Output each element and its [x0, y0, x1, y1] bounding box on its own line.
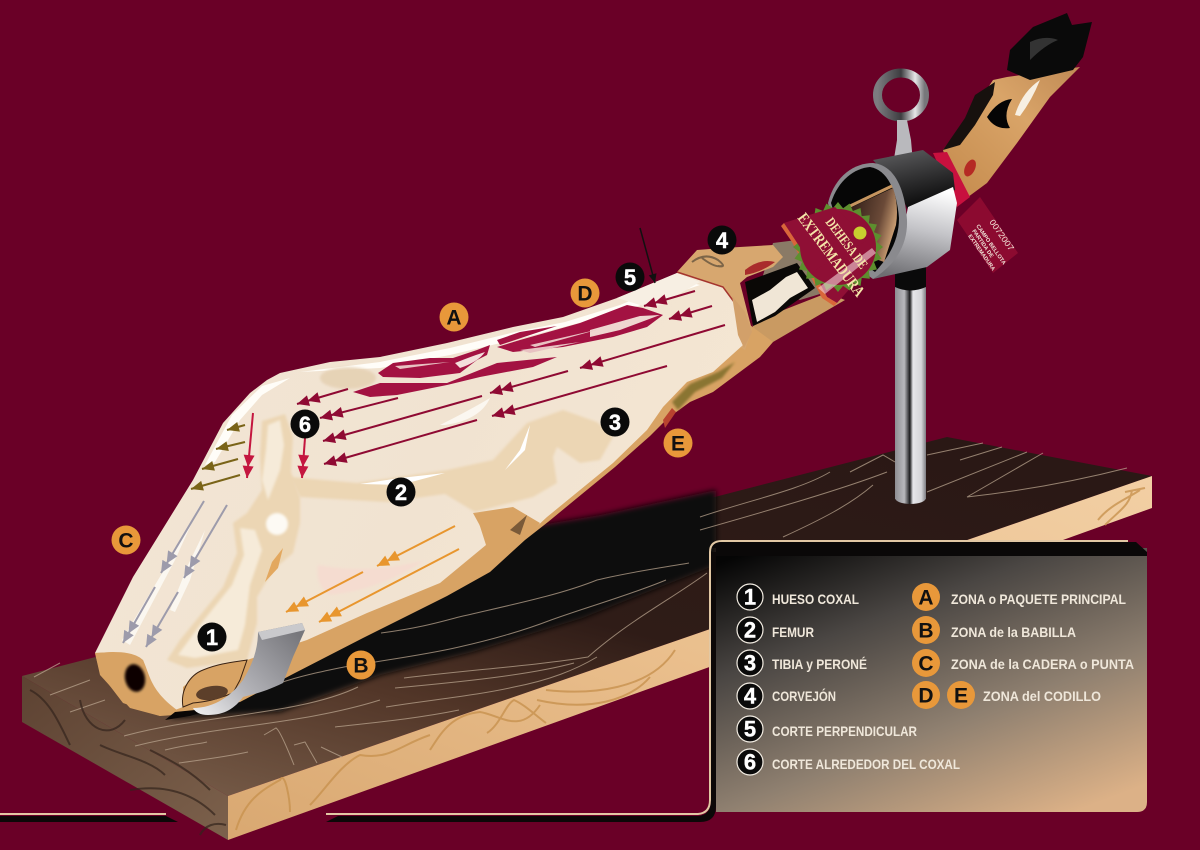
legend item B: [912, 616, 1076, 644]
legend item 2: [737, 617, 814, 643]
foot highlight: [1015, 80, 1040, 116]
legend panel: [326, 541, 1147, 822]
badge 4: 4: [716, 228, 729, 253]
collar opening rim: [828, 163, 907, 279]
wood grain top: [34, 443, 1127, 765]
legend item 6: [737, 749, 960, 775]
femoral knob: [266, 513, 288, 535]
cut face highlight: [617, 273, 700, 308]
coxal upper light core: [262, 420, 284, 500]
legend item B: B: [918, 620, 934, 642]
legend item 3: 3: [744, 650, 756, 676]
bone hollow: [265, 548, 283, 582]
pink patch: [318, 560, 425, 595]
arrows: zone C grey: [123, 501, 227, 647]
stem: [893, 120, 913, 165]
badge 6: [290, 410, 320, 438]
band text: DEHESA DE: [822, 215, 870, 272]
tag: 0072007: [987, 217, 1016, 253]
badge 3: 3: [609, 410, 621, 435]
olive blotch zone E: [672, 362, 735, 410]
legend item 3: TIBIA y PERONÉ: [772, 656, 867, 672]
legend item 5: 5: [744, 716, 756, 742]
collar upper body: [873, 150, 955, 210]
legend item 4: [737, 683, 836, 709]
panel frame line: [326, 541, 1128, 814]
wood grain front: [236, 488, 1145, 830]
tag: [957, 197, 1018, 273]
metal hook: [193, 623, 305, 715]
badge A: A: [446, 306, 462, 330]
inner tube: [850, 188, 897, 262]
badge B: [346, 650, 376, 680]
exposed bone gap: [745, 263, 815, 326]
badge E: [664, 428, 692, 458]
hoof highlight: [1030, 38, 1058, 60]
legend item A: ZONA o PAQUETE PRINCIPAL: [951, 591, 1126, 607]
bone highlights: [360, 425, 530, 485]
band seal: [854, 226, 866, 240]
badge D: D: [577, 282, 593, 306]
tube tan line: [848, 186, 892, 207]
ring: [878, 73, 924, 117]
meat muscle zone: [353, 305, 663, 397]
seal red centre: [800, 209, 876, 285]
legend item A: A: [918, 586, 934, 610]
product band: [781, 202, 883, 306]
badge 2: 2: [395, 480, 407, 505]
fat highlights: [122, 398, 490, 645]
band top strip: [784, 207, 868, 270]
legend item 5: CORTE PERPENDICULAR: [772, 723, 917, 739]
badge A: [440, 302, 468, 332]
legend item 1: HUESO COXAL: [772, 591, 859, 607]
legend item C: ZONA de la CADERA o PUNTA: [951, 656, 1134, 672]
legend item A: [912, 583, 1126, 611]
ham foot and hoof: [943, 13, 1092, 197]
band red body: [784, 207, 878, 303]
panel black edge: [326, 552, 716, 822]
stand pole: [895, 258, 926, 504]
legend item D and E: [912, 681, 1101, 709]
lobe hole: [195, 684, 229, 702]
legend item 1: 1: [744, 584, 756, 610]
red streak zone E: [663, 408, 676, 428]
metal collar: [828, 150, 957, 279]
badge 3: [600, 408, 630, 436]
legend black top band: [712, 542, 1147, 556]
legend item D and E: ZONA del CODILLO: [983, 688, 1101, 704]
board left end: [22, 676, 228, 840]
band shine: [818, 248, 876, 294]
legend item C: C: [918, 652, 934, 676]
legend item 3: [737, 650, 867, 676]
arrow: perpendicular cut: [640, 228, 655, 283]
coxal bone upper: [167, 414, 300, 668]
badge B: B: [353, 654, 369, 678]
bottom frame line: [0, 814, 178, 822]
badge 5: [616, 262, 644, 292]
exposed bone: [752, 272, 808, 322]
product band: EXTREMADURA: [794, 210, 868, 301]
legend item 2: 2: [744, 618, 756, 642]
badge C: [112, 526, 140, 554]
collar lower silver: [873, 187, 957, 279]
legend background: [716, 548, 1147, 812]
ham body: [95, 225, 850, 720]
board front face: [228, 476, 1152, 840]
wooden board: [22, 437, 1152, 840]
foot red mark: [962, 158, 978, 178]
legend item 4: 4: [744, 684, 757, 708]
arrows: olive: [191, 425, 245, 489]
legend item 5: [737, 716, 917, 742]
cut band line: [677, 272, 750, 333]
nose hole: [122, 662, 148, 694]
femur and tibia bone: [290, 410, 613, 512]
legend item D and E: D: [918, 684, 934, 708]
tag: PARTIDA DE: [970, 229, 994, 259]
coxal lower light core: [178, 528, 262, 658]
tag: CAMPO BELLOTA: [974, 224, 1007, 266]
badge 6: 6: [299, 412, 311, 437]
lower shank: [752, 293, 845, 345]
tan band by the cut: [732, 296, 752, 348]
hock skin: [677, 245, 783, 350]
cast shadow: [170, 490, 716, 718]
grey skinned shank: [760, 225, 850, 300]
legend item C: [912, 649, 1134, 677]
board top face: [22, 437, 1152, 796]
foot skin: [943, 67, 1080, 197]
wood grain left end: [30, 690, 226, 835]
legend item D and E: E: [954, 684, 968, 708]
badge C: C: [118, 530, 134, 552]
hoof: [1007, 13, 1092, 80]
green starburst: [793, 202, 883, 292]
legend item 6: 6: [744, 750, 756, 774]
legend item 6: CORTE ALREDEDOR DEL COXAL: [772, 756, 960, 772]
badge 1: 1: [206, 625, 218, 650]
badge 2: [386, 478, 416, 506]
wedge near femur: [473, 507, 540, 555]
top highlight: [205, 280, 700, 465]
dark fold near wedge: [510, 515, 527, 535]
legend item 2: FEMUR: [772, 624, 814, 640]
collar interior: [831, 167, 899, 272]
badge 4: [708, 226, 736, 254]
warm patch: [320, 367, 376, 389]
legend item 1: [737, 584, 859, 610]
badge 5: 5: [624, 265, 636, 290]
arrows: coxal cuts: [247, 413, 305, 478]
badge E: E: [671, 432, 685, 456]
red band on foot: [933, 152, 970, 207]
band orange edge: [781, 223, 837, 306]
arrows: zone B orange: [286, 526, 459, 622]
arrows: zone A and D cuts: [297, 291, 725, 464]
hock crease: [692, 256, 723, 266]
cream meat face: [95, 273, 750, 710]
eye bolt: [878, 73, 924, 165]
badge 1: [198, 622, 226, 652]
tan rind: [95, 325, 773, 716]
hock red mark: [745, 261, 775, 275]
lower tan lobe: [182, 660, 247, 707]
nose under shadow: [165, 708, 215, 720]
tag: EXTREMADURA: [966, 234, 996, 272]
legend item 4: CORVEJÓN: [772, 687, 836, 704]
badge D: [570, 278, 600, 308]
legend item B: ZONA de la BABILLA: [951, 624, 1076, 640]
dew claw dark strip: [943, 82, 995, 150]
foot hole: [987, 99, 1012, 128]
nose of ham: [95, 652, 177, 716]
